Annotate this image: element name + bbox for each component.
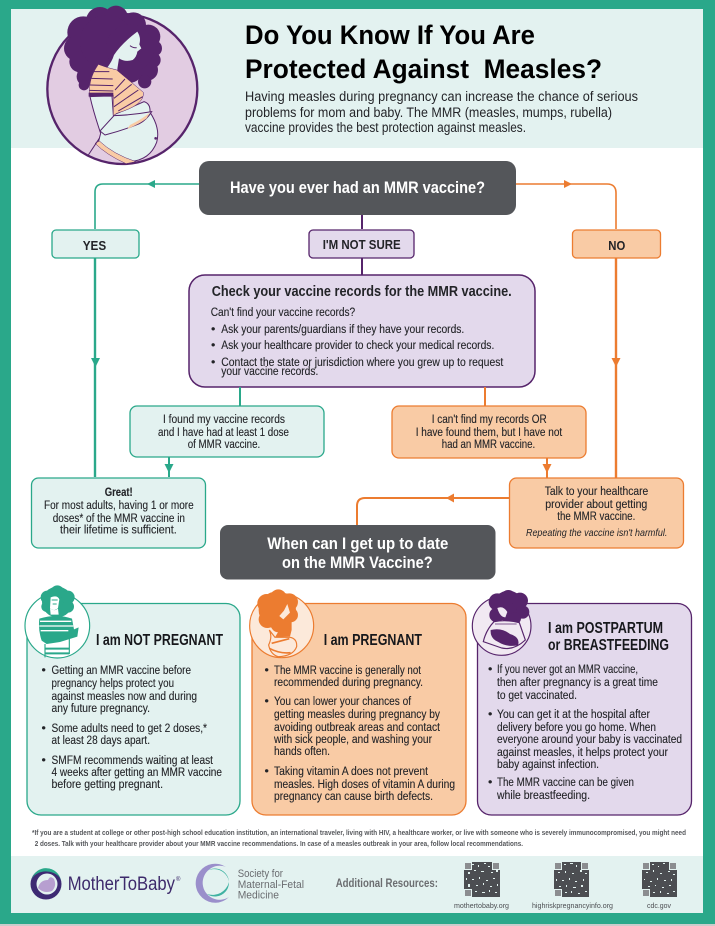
panel: pregnant bbox=[250, 589, 466, 815]
bullet list: • bbox=[42, 753, 46, 767]
box: great: Great! bbox=[105, 485, 133, 499]
panel: check records: • bbox=[211, 355, 215, 369]
connectors under records panel bbox=[164, 387, 552, 525]
bullet list: If you never got an MMR vaccine, bbox=[497, 662, 638, 676]
QR code: highriskpregnancyinfo.org bbox=[532, 862, 613, 910]
box: cannot find records: I have found them, but I have not bbox=[416, 425, 563, 439]
bullet list: pregnancy can cause birth defects. bbox=[274, 789, 433, 803]
logo: Society for Maternal-Fetal Medicine: Medicine bbox=[238, 890, 279, 902]
bullet list: • bbox=[264, 764, 269, 778]
bullet list: 4 weeks after getting an MMR vaccine bbox=[52, 765, 222, 779]
bullet list: any future pregnancy. bbox=[52, 701, 150, 715]
panel: check records: Ask your parents/guardians if they have your records. bbox=[221, 322, 464, 336]
answer: yes bbox=[52, 230, 139, 258]
heading: I am POSTPARTUM bbox=[548, 620, 663, 637]
bullet list: • bbox=[488, 662, 492, 676]
arrow: to NO bbox=[516, 180, 620, 478]
heading: I am PREGNANT bbox=[324, 632, 422, 649]
box: talk to provider: Repeating the vaccine isn't harmful. bbox=[526, 527, 667, 539]
box: cannot find records: had an MMR vaccine. bbox=[442, 437, 535, 451]
box: cannot find records: I can't find my records OR bbox=[432, 412, 547, 426]
additional resources label: Additional Resources: bbox=[336, 878, 438, 890]
answer: not sure: I'M NOT SURE bbox=[323, 237, 401, 252]
icon: breastfeeding woman bbox=[472, 590, 531, 655]
panel: postpartum or breastfeeding bbox=[472, 590, 692, 815]
intro text bbox=[245, 89, 638, 135]
question box: ever had vaccine: Have you ever had an MMR vaccine? bbox=[230, 178, 485, 197]
box: great: doses* of the MMR vaccine in bbox=[53, 511, 185, 525]
bullet list: hands often. bbox=[274, 744, 330, 758]
panel: check records: • bbox=[211, 322, 215, 336]
box: talk to provider: the MMR vaccine. bbox=[557, 509, 635, 523]
bullet list bbox=[42, 663, 222, 791]
question box: when up to date: When can I get up to date bbox=[267, 534, 448, 553]
logo: Society for Maternal-Fetal Medicine bbox=[196, 864, 304, 903]
logo: MotherToBaby: MotherToBaby bbox=[68, 874, 175, 895]
bullet list: • bbox=[42, 721, 46, 735]
QR code: cdc.gov bbox=[642, 862, 677, 910]
panel: check records: • bbox=[211, 338, 215, 352]
box: found records: and I have had at least 1 dose bbox=[158, 425, 289, 439]
bullet list: at least 28 days apart. bbox=[52, 733, 150, 747]
bullet list: The MMR vaccine is generally not bbox=[274, 663, 421, 677]
footnote: 2 doses. Talk with your healthcare provider about your MMR vaccine recommendations. In case of a measles outbreak in your area, follow local recommendations. bbox=[35, 839, 523, 848]
heading bbox=[548, 620, 669, 654]
bullet list: while breastfeeding. bbox=[496, 788, 590, 802]
question box: when up to date bbox=[220, 525, 496, 580]
intro text: Having measles during pregnancy can increase the chance of serious bbox=[245, 89, 638, 104]
box: talk to provider: provider about getting bbox=[545, 497, 647, 511]
footnote bbox=[32, 828, 686, 848]
bullet list: baby against infection. bbox=[497, 757, 599, 771]
icon: pregnant woman bbox=[250, 589, 314, 658]
heading: I am NOT PREGNANT bbox=[96, 632, 223, 649]
panel: check records: Contact the state or jurisdiction where you grew up to request bbox=[221, 355, 504, 369]
arrow: to YES bbox=[91, 180, 199, 477]
bullet list: to get vaccinated. bbox=[497, 688, 577, 702]
bullet list: • bbox=[488, 775, 492, 789]
panel: check records bbox=[189, 275, 535, 387]
bullet list: SMFM recommends waiting at least bbox=[52, 753, 213, 767]
bullet list: pregnancy helps protect you bbox=[52, 676, 174, 690]
box: found records: of MMR vaccine. bbox=[188, 437, 260, 451]
title bbox=[245, 20, 602, 84]
QR code: highriskpregnancyinfo.org: highriskpregnancyinfo.org bbox=[532, 901, 613, 910]
bullet list: against measles, it helps protect your bbox=[497, 745, 668, 759]
bullet list: Some adults need to get 2 doses,* bbox=[52, 721, 207, 735]
panel: check records: Ask your healthcare provider to check your medical records. bbox=[221, 338, 494, 352]
panel: check records: Check your vaccine records for the MMR vaccine. bbox=[212, 284, 512, 300]
logo: MotherToBaby bbox=[30, 868, 181, 900]
connector: not sure bbox=[361, 215, 363, 275]
bullet list: getting measles during pregnancy by bbox=[274, 707, 441, 721]
bullet list: • bbox=[264, 694, 269, 708]
box: great: For most adults, having 1 or more bbox=[44, 498, 194, 512]
QR code: mothertobaby.org bbox=[454, 862, 509, 910]
bullet list: avoiding outbreak areas and contact bbox=[274, 720, 440, 734]
heading: or BREASTFEEDING bbox=[548, 637, 669, 654]
icon: woman not pregnant bbox=[25, 585, 90, 658]
intro text: vaccine provides the best protection against measles. bbox=[245, 120, 526, 135]
box: found records: I found my vaccine records bbox=[163, 412, 285, 426]
question box: when up to date: on the MMR Vaccine? bbox=[282, 553, 433, 572]
box: talk to provider bbox=[510, 478, 684, 548]
title: Protected Against Measles? bbox=[245, 54, 602, 84]
bullet list: The MMR vaccine can be given bbox=[497, 775, 634, 789]
box: great bbox=[32, 478, 206, 548]
bullet list: Getting an MMR vaccine before bbox=[52, 663, 191, 677]
intro text: problems for mom and baby. The MMR (measles, mumps, rubella) bbox=[245, 105, 612, 120]
bullet list: You can get it at the hospital after bbox=[497, 707, 650, 721]
box: cannot find records bbox=[392, 406, 586, 458]
bullet list: You can lower your chances of bbox=[274, 694, 411, 708]
answer: no: NO bbox=[608, 238, 625, 253]
bullet list: Taking vitamin A does not prevent bbox=[274, 764, 428, 778]
panel: not pregnant bbox=[25, 585, 240, 815]
box: talk to provider: Talk to your healthcare bbox=[545, 484, 648, 498]
QR code: mothertobaby.org: mothertobaby.org bbox=[454, 901, 509, 910]
bullet list: before getting pregnant. bbox=[52, 777, 163, 791]
answer: yes: YES bbox=[83, 238, 106, 253]
title: Do You Know If You Are bbox=[245, 20, 535, 50]
bullet list: recommended during pregnancy. bbox=[274, 675, 423, 689]
panel: check records: your vaccine records. bbox=[221, 364, 318, 378]
logo: MotherToBaby: ® bbox=[176, 876, 181, 883]
bullet list: then after pregnancy is a great time bbox=[497, 675, 658, 689]
illustration: pregnant woman in circle bbox=[47, 6, 197, 164]
bullet list bbox=[488, 662, 682, 802]
box: found records bbox=[130, 406, 324, 457]
bullet list bbox=[264, 663, 455, 803]
question box: ever had vaccine bbox=[199, 161, 516, 215]
box: great: their lifetime is sufficient. bbox=[60, 522, 177, 536]
bullet list: delivery before you go home. When bbox=[497, 720, 656, 734]
bullet list: against measles now and during bbox=[52, 689, 197, 703]
answer: not sure bbox=[309, 230, 414, 258]
bullet list: with sick people, and washing your bbox=[273, 732, 432, 746]
bullet list: • bbox=[488, 707, 492, 721]
logo: Society for Maternal-Fetal Medicine: Maternal-Fetal bbox=[238, 879, 304, 891]
logo: Society for Maternal-Fetal Medicine: Society for bbox=[238, 868, 283, 880]
panel: check records: Can't find your vaccine records? bbox=[211, 305, 355, 319]
answer: no bbox=[572, 230, 660, 258]
bullet list: measles. High doses of vitamin A during bbox=[274, 777, 455, 791]
bullet list: • bbox=[264, 663, 269, 677]
QR code: cdc.gov: cdc.gov bbox=[647, 901, 671, 910]
bullet list: • bbox=[42, 663, 46, 677]
